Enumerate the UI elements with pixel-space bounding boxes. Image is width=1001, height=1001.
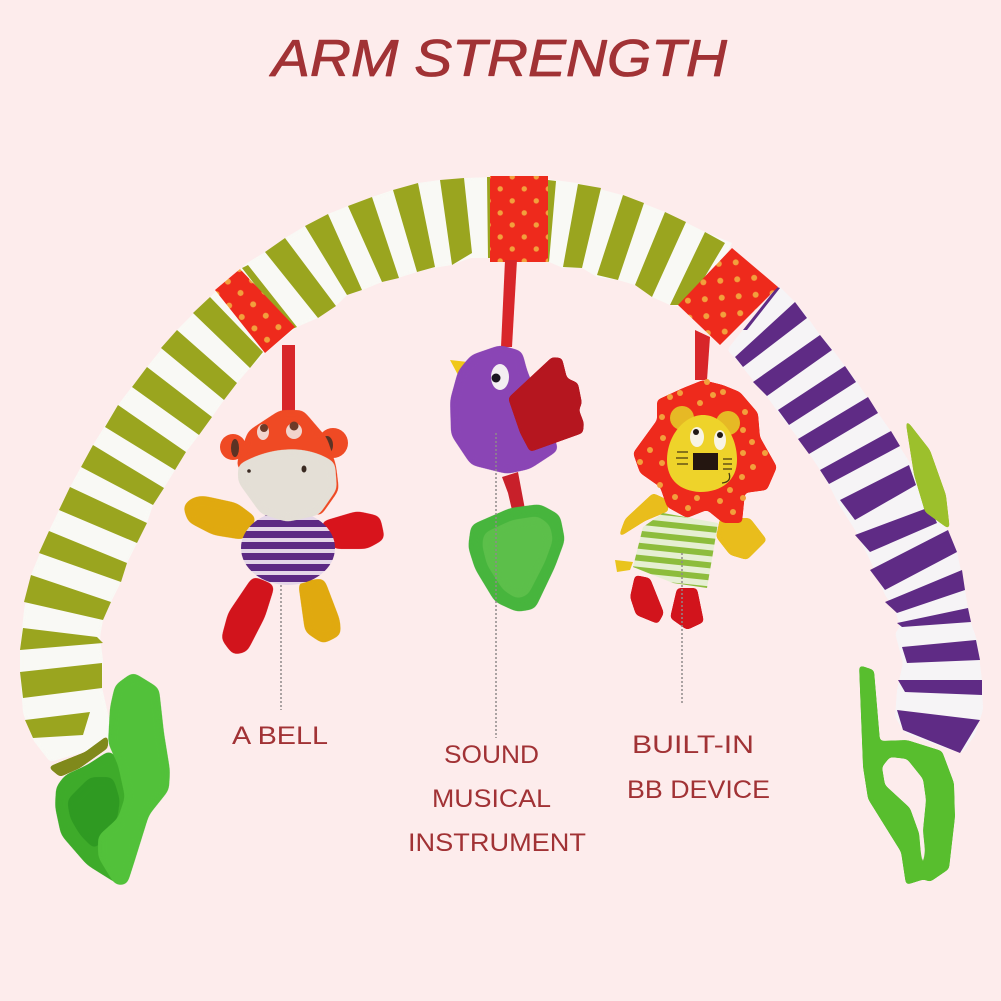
label: built-in bb device: BUILT-IN [632,731,754,759]
olive stripes top [545,180,725,305]
label: sound musical instrument [408,741,586,857]
lion legs [630,575,664,624]
bird wing [508,357,584,452]
striped arch: left olive section [20,177,492,777]
red dotted band: right [678,248,778,345]
clip paddle [98,672,170,885]
right green clip [859,665,955,885]
bear limbs [183,496,257,540]
label: built-in bb device [627,731,770,804]
striped arch: right purple section [545,179,983,753]
label: built-in bb device: BB DEVICE [627,776,770,804]
clip inner hollow [67,777,120,850]
teether inner [482,516,553,599]
bird eye [491,364,509,390]
hanging bear toy [183,345,385,655]
red dotted band: centre [490,176,548,262]
lion face [670,406,694,430]
green tag [905,418,950,530]
bear cap [236,410,339,517]
strap [501,260,517,347]
arch base lower [727,285,983,753]
purple stripes [735,287,982,753]
hanging lion toy [615,330,777,630]
label: sound musical instrument: INSTRUMENT [408,829,586,857]
label: a bell: A BELL [232,722,328,750]
olive stripes [20,177,492,738]
label: sound musical instrument: SOUND [444,741,539,769]
arch base [20,177,492,762]
beak [450,360,468,375]
strap [282,345,295,415]
bear ears [220,434,246,460]
mane dots [637,379,768,515]
ruffled end [48,735,108,777]
cap eyes [257,424,269,440]
red dotted band: left [215,269,295,353]
title: ARM STRENGTH [269,30,727,88]
lion body [633,513,718,588]
label: sound musical instrument: MUSICAL [432,785,551,813]
bird body [450,345,559,474]
hanging bird toy and teether [450,260,584,612]
dotted leader lines [280,585,282,710]
lion mane [633,380,777,523]
green teether [468,504,565,612]
clip back ring [55,750,132,885]
bear body [241,511,335,585]
arch base top [547,179,732,310]
strap [695,330,710,380]
lion arms [618,493,669,538]
bear face [238,449,337,522]
left green clip [55,672,170,885]
